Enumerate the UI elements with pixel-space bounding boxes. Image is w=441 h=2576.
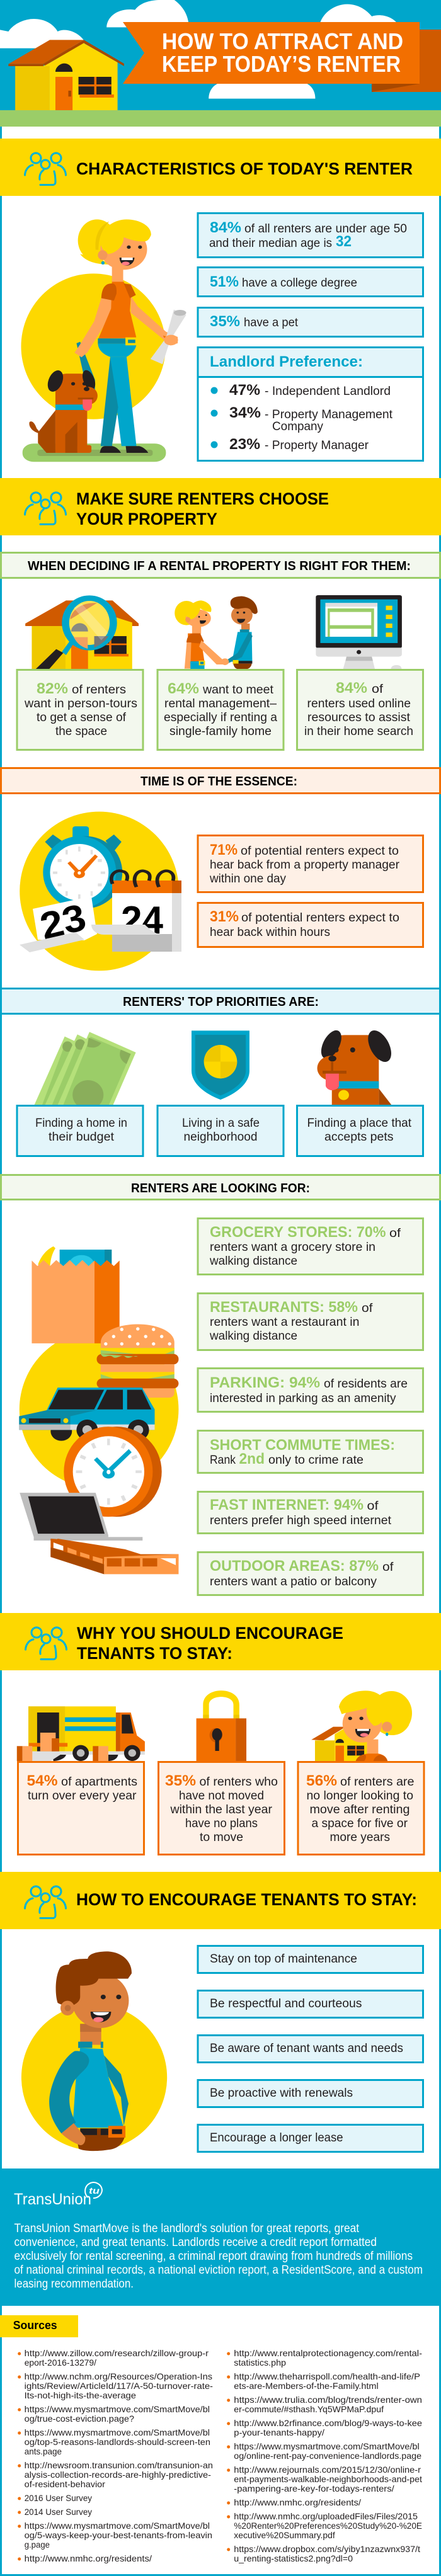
list: sources right column: http://www.rejournals.com/2015/12/30/online-r [234, 2465, 421, 2475]
stat card: online resources: in their home search [304, 725, 413, 738]
illustration: renter and manager shaking hands [175, 596, 258, 669]
bar: renters are looking for [1, 1175, 440, 1199]
stat card: in-person tours: to get a sense of [37, 711, 127, 724]
stat card: not looking to move: move after renting [310, 1803, 410, 1816]
stat: short commute: only to crime rate [268, 1454, 364, 1467]
stat card: in-person tours: 82% [37, 680, 68, 697]
section heading: how to encourage tenants [0, 1872, 441, 1929]
list: sources left column: 2016 User Survey [25, 2493, 92, 2503]
stat: short commute: Rank [210, 1454, 236, 1467]
list: sources left column: og/true-cost-eviction.page? [25, 2414, 134, 2424]
stat card: no plans to move: to move [200, 1831, 243, 1844]
stat card: no plans to move: of renters who [199, 1775, 278, 1789]
tip: maintenance [198, 1946, 423, 1973]
panel: landlord preference: 47% [229, 382, 260, 399]
illustration: desktop computer [316, 595, 402, 669]
illustration: stopwatch and calendar [20, 812, 181, 971]
panel: landlord preference: - Property Management [265, 408, 393, 421]
list: sources left column: eport-2016-13279/ [25, 2357, 96, 2368]
calendar page 23 [20, 896, 97, 952]
stat: fast internet [198, 1491, 423, 1533]
stat: respond within one day: hear back from a property manager [210, 858, 400, 872]
illustration: smiling man [21, 1951, 167, 2151]
stat card: meet management: 64% [168, 680, 199, 697]
illustration: padlock [197, 1690, 246, 1761]
stat: pet [198, 307, 423, 336]
card: budget [17, 1106, 143, 1156]
list: sources left column: ants.page [25, 2446, 62, 2456]
stat card: not looking to move: a space for five or [311, 1817, 408, 1830]
bar: when deciding: WHEN DECIDING IF A RENTAL PROPERTY IS RIGHT FOR THEM: [28, 559, 411, 573]
stat: fast internet: renters prefer high speed internet [210, 1514, 392, 1527]
stat card: turnover: 54% [26, 1772, 58, 1789]
card: accepts pets: Finding a place that [307, 1117, 412, 1130]
stat card: no plans to move: have no plans [185, 1817, 258, 1830]
icon: people [25, 1627, 67, 1659]
stat: college degree: have a college degree [242, 276, 357, 290]
clock [64, 1427, 162, 1517]
panel: landlord preference: Company [272, 420, 323, 433]
stat card: not looking to move: more years [330, 1831, 390, 1844]
card: budget: their budget [49, 1131, 115, 1144]
burger [97, 1324, 178, 1398]
stat: restaurants: RESTAURANTS: 58% [210, 1299, 358, 1316]
stat: parking [198, 1368, 423, 1412]
stat: respond within hours: 31% [210, 908, 239, 925]
bar: time is of the essence: TIME IS OF THE ESSENCE: [140, 775, 297, 789]
icon: people [25, 493, 66, 524]
stat: respond within one day: 71% [210, 841, 238, 858]
list: sources left column: g.page [25, 2539, 50, 2550]
illustration: amenities stack [19, 1246, 178, 1574]
list: sources left column: https://www.mysmartmove.com/SmartMove/bl [25, 2404, 210, 2414]
list: sources left column: http://www.nchm.org/Resources/Operation-Ins [25, 2371, 212, 2381]
calendar page 24 [91, 871, 181, 952]
list: sources right column: p-your-tenants-happy/ [234, 2427, 324, 2437]
stat: parking: PARKING: 94% [210, 1374, 320, 1391]
section heading: choose your property: MAKE SURE RENTERS CHOOSE [76, 489, 329, 508]
stat card: in-person tours: want in person-tours [24, 697, 137, 710]
tip: renewals [198, 2080, 423, 2107]
stat: respond within hours: of potential renters expect to [241, 911, 399, 925]
stat: grocery stores [198, 1218, 423, 1275]
stat: age [198, 213, 423, 257]
title banner [123, 22, 441, 92]
panel: landlord preference: - Independent Landlord [265, 385, 391, 398]
heading: sources [0, 2315, 78, 2337]
icon: people [25, 153, 66, 185]
section heading: choose your property: YOUR PROPERTY [76, 510, 217, 528]
stat card: not looking to move: of renters are [340, 1775, 415, 1789]
stat: pet: have a pet [244, 316, 299, 329]
logo: TransUnion [14, 2182, 102, 2208]
card: accepts pets: accepts pets [324, 1131, 393, 1144]
stat: outdoor areas: OUTDOOR AREAS: 87% [210, 1558, 379, 1575]
patio [50, 1539, 178, 1574]
list: sources left column: alysis-collection-records-are-highly-predictive- [25, 2470, 211, 2480]
illustration: woman with dog [21, 219, 186, 462]
tip: longer lease [198, 2125, 423, 2151]
bar: time is of the essence [1, 768, 440, 794]
section heading: why encourage tenants [0, 1613, 441, 1670]
card: accepts pets [297, 1106, 423, 1156]
stat: outdoor areas: of [382, 1561, 394, 1574]
list: sources left column: http://www.nmhc.org/residents/ [25, 2553, 152, 2563]
stat: outdoor areas: renters want a patio or balcony [210, 1575, 377, 1588]
section heading: choose your property [0, 478, 441, 535]
section heading: characteristics [0, 139, 441, 196]
grocery bag [32, 1246, 120, 1343]
list: sources left column: ights/Review/ArticleId/117/A-50-turnover-rate- [25, 2381, 213, 2391]
panel: TransUnion about: TransUnion SmartMove is the landlord's solution for great reports, great [14, 2222, 360, 2235]
card: budget: Finding a home in [35, 1117, 127, 1130]
stat: restaurants: of [362, 1302, 373, 1315]
logo: TransUnion: tu [89, 2186, 100, 2196]
stat: restaurants: walking distance [209, 1330, 297, 1343]
list: sources right column [227, 2348, 422, 2563]
list: sources left column: http://newsroom.transunion.com/transunion-an [25, 2460, 213, 2470]
stat: college degree: 51% [210, 273, 239, 290]
calendar page 24: 24 [121, 899, 163, 942]
list: sources left column: og/5-ways-keep-your-best-tenants-from-leavin [25, 2530, 212, 2540]
panel: TransUnion about [0, 2169, 441, 2306]
tip: respectful [198, 1990, 423, 2018]
stat card: online resources [297, 670, 423, 749]
tip: longer lease: Encourage a longer lease [210, 2131, 343, 2145]
stat card: turnover [18, 1762, 144, 1854]
laptop [20, 1493, 142, 1541]
panel: landlord preference: 34% [229, 404, 261, 421]
illustration: shield [192, 1030, 249, 1100]
list: sources right column: u_renting-statistics2.png?dl=0 [234, 2553, 353, 2563]
stat: grocery stores: renters want a grocery store in [210, 1241, 375, 1254]
section heading: why encourage tenants: TENANTS TO STAY: [77, 1644, 232, 1663]
panel: landlord preference: - Property Manager [265, 439, 369, 452]
list: sources left column: Its-not-high-its-the-average [25, 2390, 136, 2400]
stat: age: 32 [336, 233, 352, 250]
stat: respond within one day: within one day [209, 872, 286, 886]
stat: respond within hours: hear back within hours [210, 926, 330, 939]
list: sources right column: http://www.theharrispoll.com/health-and-life/P [234, 2371, 420, 2381]
logo: TransUnion: TransUnion [14, 2191, 91, 2208]
stat card: meet management: rental management– [164, 697, 277, 710]
panel: landlord preference: 23% [229, 436, 260, 453]
stat: short commute: 2nd [239, 1450, 265, 1468]
card: safe neighborhood [158, 1106, 284, 1156]
card: safe neighborhood: neighborhood [184, 1131, 257, 1144]
stat card: meet management: especially if renting a [164, 711, 277, 724]
list: sources right column: http://www.nmhc.org/uploadedFiles/Files/2015 [234, 2511, 418, 2521]
stat: pet: 35% [210, 313, 240, 330]
stat card: meet management: single-family home [169, 725, 272, 738]
stat: age: and their median age is [209, 237, 332, 250]
stat card: in-person tours: the space [55, 725, 107, 738]
stat: outdoor areas [198, 1552, 423, 1595]
bar: renters are looking for: RENTERS ARE LOOKING FOR: [131, 1182, 310, 1195]
title banner: KEEP TODAY’S RENTER [162, 51, 401, 77]
panel: landlord preference: Landlord Preference: [210, 353, 363, 370]
icon: people [25, 1886, 66, 1918]
stat: respond within hours [198, 903, 423, 947]
tip: renewals: Be proactive with renewals [210, 2087, 353, 2100]
stat: restaurants [198, 1294, 423, 1350]
tip: tenant wants [198, 2036, 423, 2062]
stat: respond within one day: of potential renters expect to [241, 845, 399, 858]
illustration: money [34, 1032, 136, 1110]
stat: grocery stores: walking distance [209, 1255, 297, 1268]
bar: when deciding [1, 553, 440, 578]
list: sources right column: statistics.php [234, 2357, 286, 2368]
stat: grocery stores: of [389, 1227, 401, 1240]
stat: respond within one day [198, 835, 423, 892]
section heading: characteristics: CHARACTERISTICS OF TODAY'S RENTER [76, 159, 413, 178]
icon: house [8, 40, 124, 110]
stat: parking: interested in parking as an amenity [210, 1392, 396, 1405]
list: sources left column: https://www.mysmartmove.com/SmartMove/bl [25, 2521, 210, 2531]
list: sources right column: http://www.nmhc.org/residents/ [234, 2497, 361, 2507]
stat card: meet management [158, 670, 284, 749]
clouds [0, 0, 397, 99]
panel: landlord preference [198, 348, 423, 461]
list: sources right column: %20Renter%20Preferences%20Study%20-%20E [234, 2521, 422, 2531]
section heading: how to encourage tenants: HOW TO ENCOURAGE TENANTS TO STAY: [76, 1890, 417, 1909]
stat: parking: of residents are [324, 1377, 408, 1391]
illustration: dog [317, 1029, 396, 1105]
list: sources left column: of-resident-behavior [25, 2479, 105, 2489]
list: sources left column [18, 2348, 213, 2563]
stat card: turnover: of apartments [61, 1775, 137, 1789]
list: sources right column: http://www.b2rfinance.com/blog/9-ways-to-kee [234, 2418, 422, 2428]
card: safe neighborhood: Living in a safe [182, 1117, 260, 1130]
list: sources right column: https://www.mysmartmove.com/SmartMove/bl [234, 2441, 420, 2451]
list: sources right column: er-commute/#sthash.Yq5WPMaP.dpuf [234, 2404, 384, 2414]
stat card: no plans to move: within the last year [169, 1803, 273, 1816]
list: sources right column: http://www.rentalprotectionagency.com/rental- [234, 2348, 422, 2358]
stat: short commute: SHORT COMMUTE TIMES: [210, 1437, 395, 1454]
stat: grocery stores: GROCERY STORES: 70% [210, 1224, 386, 1241]
stat card: in-person tours [17, 670, 143, 749]
stat: fast internet: FAST INTERNET: 94% [210, 1496, 364, 1513]
tip: tenant wants: Be aware of tenant wants and needs [210, 2042, 403, 2055]
illustration: woman with small house [311, 1690, 412, 1761]
stat card: online resources: resources to assist [307, 711, 411, 724]
list: sources left column: http://www.zillow.com/research/zillow-group-r [25, 2348, 209, 2358]
stat: restaurants: renters want a restaurant in [210, 1316, 359, 1329]
bar: top priorities: RENTERS' TOP PRIORITIES ARE: [123, 995, 319, 1009]
stat card: not looking to move: no longer looking to [306, 1789, 413, 1803]
stat: short commute [198, 1431, 423, 1473]
title banner: HOW TO ATTRACT AND [162, 28, 403, 54]
section heading: why encourage tenants: WHY YOU SHOULD ENCOURAGE [77, 1624, 343, 1643]
stat: age: of all renters are under age 50 [244, 222, 407, 236]
illustration: house under magnifying glass [25, 595, 139, 669]
stat card: not looking to move: 56% [306, 1772, 337, 1789]
stat card: no plans to move: have not moved [179, 1789, 264, 1803]
stat card: online resources: of [372, 683, 384, 696]
stat card: no plans to move [159, 1762, 285, 1854]
list: sources right column: https://www.trulia.com/blog/trends/renter-own [234, 2395, 422, 2405]
list: sources right column: -pampering-are-key-for-todays-renters/ [234, 2483, 394, 2493]
panel: TransUnion about: convenience, and great tenants. Landlords receive a credit report formatted [14, 2236, 377, 2249]
tip: maintenance: Stay on top of maintenance [210, 1952, 357, 1966]
list: sources left column: og/top-5-reasons-landlords-should-screen-ten [25, 2437, 210, 2447]
stat card: no plans to move: 35% [165, 1772, 196, 1789]
tip: respectful: Be respectful and courteous [210, 1997, 362, 2010]
stat: fast internet: of [367, 1500, 379, 1513]
list: sources right column: https://www.dropbox.com/s/yiby1nzazwnx937/t [234, 2544, 420, 2554]
list: sources left column: https://www.mysmartmove.com/SmartMove/bl [25, 2427, 210, 2437]
bar: top priorities [1, 989, 440, 1014]
stat card: not looking to move [298, 1762, 424, 1854]
car [19, 1388, 155, 1441]
stat card: turnover: turn over every year [28, 1789, 137, 1803]
panel: TransUnion about: leasing recommendation. [14, 2277, 134, 2291]
panel: TransUnion about: exclusively for rental screening, a criminal report drawing from hundreds of millions [14, 2250, 413, 2263]
list: sources right column: xecutive%20Summary.pdf [234, 2530, 335, 2540]
stat card: online resources: 84% [336, 680, 367, 697]
stat card: meet management: want to meet [202, 683, 274, 697]
stat: age: 84% [210, 219, 241, 236]
stat card: in-person tours: of renters [72, 683, 126, 697]
stat: college degree [198, 267, 423, 296]
list: sources right column: ent-payments-walkable-neighborhoods-and-pet [234, 2474, 422, 2484]
list: sources left column: 2014 User Survey [25, 2507, 92, 2517]
list: sources right column: ets-are-Members-of-the-Family.html [234, 2381, 379, 2391]
stat card: online resources: renters used online [307, 697, 411, 710]
calendar page 23: 23 [36, 896, 90, 948]
list: sources right column: og/online-rent-pay-convenience-landlords.page [234, 2451, 421, 2461]
heading: sources: Sources [13, 2319, 57, 2332]
illustration: moving truck [17, 1706, 145, 1761]
header: sky, house and title banner [0, 0, 441, 127]
